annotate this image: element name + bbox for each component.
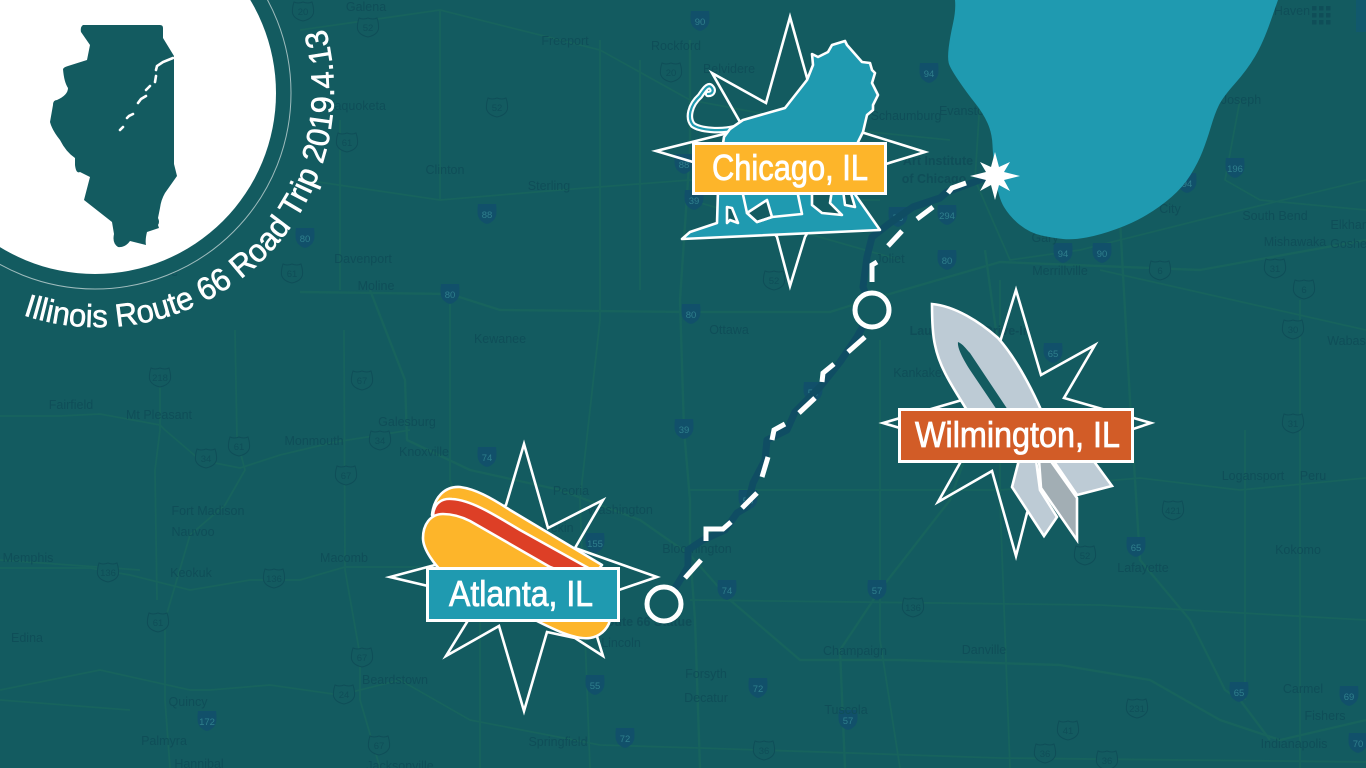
map: place names: Macomb <box>320 551 368 565</box>
map: place names: Pekin <box>542 521 574 535</box>
map: US route shields: 61 <box>342 138 352 149</box>
map: place names: Beardstown <box>362 673 428 687</box>
map: US route shields: 31 <box>1288 419 1298 430</box>
map: place names: Palmyra <box>141 734 187 748</box>
map: US route shields: 36 <box>1040 749 1050 760</box>
icon: lion body <box>722 41 878 150</box>
map: place names: Joseph <box>1221 93 1261 107</box>
map: place names: Tuscola <box>824 703 868 717</box>
map: place names: Springfield <box>528 735 588 749</box>
map: interstate shields: 94 <box>1182 179 1192 190</box>
map: US route shields: 231 <box>1129 704 1145 715</box>
map: place names: Monmouth <box>284 434 344 448</box>
map: US route shields: 52 <box>363 23 373 34</box>
map: US route shields: 20 <box>666 68 676 79</box>
map: US route shields: 67 <box>374 741 384 752</box>
roundel outer ring <box>0 0 291 289</box>
map: interstate shields: 172 <box>199 717 215 728</box>
map: US route shields: 34 <box>201 454 211 465</box>
map: place names: Evanston <box>939 104 991 118</box>
map: interstate shields: 74 <box>482 453 492 464</box>
roundel backing <box>0 0 291 289</box>
map: interstate shields: 55 <box>808 388 818 399</box>
map: place names: Clinton <box>426 163 464 177</box>
title: curved text: Illinois Route 66 Road Trip 2019.4.13 <box>25 30 334 328</box>
map: interstate shields: 155 <box>587 539 603 550</box>
map: US route shields: 136 <box>266 574 282 585</box>
map: place names: Bloomington <box>662 542 732 556</box>
route: dark road line <box>664 178 985 604</box>
lake michigan <box>948 0 1278 239</box>
map: place names: Ottawa <box>709 323 749 337</box>
map: US route shields: 52 <box>492 103 502 114</box>
map: interstate shields: 88 <box>482 210 492 221</box>
map: place names: Kewanee <box>474 332 526 346</box>
map: interstate shields: 196 <box>1227 164 1243 175</box>
map: place names: Joliet <box>875 252 905 266</box>
map: US route shields: 24 <box>339 690 349 701</box>
map: place names: Gary <box>1031 231 1059 245</box>
map: US route shields: 6 <box>1301 285 1307 296</box>
map: interstate shields: 65 <box>1048 349 1058 360</box>
map: US route shields: 52 <box>769 276 779 287</box>
map: place names: Logansport <box>1222 469 1285 483</box>
map: place names: Maquoketa <box>324 99 386 113</box>
map: place names: Danville <box>962 643 1006 657</box>
map: place names: Galesburg <box>378 415 436 429</box>
map: interstate shields: 88 <box>679 160 689 171</box>
map: place names: Memphis <box>3 551 53 565</box>
map: place names: Decatur <box>684 691 728 705</box>
map: US route shields: 61 <box>153 618 163 629</box>
icon: hot dog <box>423 487 610 638</box>
map: place names: Peoria <box>553 484 589 498</box>
label: Atlanta, IL: Atlanta, IL <box>449 573 593 614</box>
map: interstate shields: 72 <box>620 734 630 745</box>
icon: route start star <box>970 152 1020 200</box>
map: place names: City <box>1159 202 1182 216</box>
map: place names: Quincy <box>169 695 208 709</box>
map: US route shields: 52 <box>1080 551 1090 562</box>
map: US route shields: 67 <box>357 376 367 387</box>
map: place names: Fishers <box>1305 709 1345 723</box>
map: US route shields: 61 <box>287 269 297 280</box>
map: place names: Freeport <box>541 34 589 48</box>
badge: Atlanta <box>390 444 657 711</box>
map: interstate shields: 94 <box>1058 249 1068 260</box>
label: Chicago, IL: Chicago, IL <box>712 147 868 188</box>
map: interstate shields: 74 <box>722 586 732 597</box>
map: place names: Rockford <box>651 39 701 53</box>
badge: Chicago <box>656 17 925 286</box>
map: place names: Fairfield <box>49 398 93 412</box>
map: place names: Paul's Route 66 Statue <box>558 615 692 629</box>
map: place names: Nauvoo <box>171 525 215 539</box>
map: place names: Merrillville <box>1032 264 1088 278</box>
map: place names: Belvidere <box>703 62 755 76</box>
map: interstate shields: 69 <box>1344 692 1354 703</box>
stop marker: Wilmington <box>855 293 889 327</box>
route: white dashes <box>685 183 966 578</box>
map: interstate shields: 39 <box>689 196 699 207</box>
map: place names: Edina <box>11 631 43 645</box>
route dashes on state map <box>120 58 173 130</box>
map: US route shields: 36 <box>759 746 769 757</box>
map: US route shields: 36 <box>1102 756 1112 767</box>
stop marker: Atlanta <box>647 587 681 621</box>
map: place names: Kokomo <box>1275 543 1321 557</box>
map: interstate shields: 72 <box>753 684 763 695</box>
map: interstate shields: 55 <box>590 681 600 692</box>
map: US route shields: 136 <box>905 603 921 614</box>
map: interstate shields: 80 <box>445 290 455 301</box>
map: interstate shields: 80 <box>942 256 952 267</box>
map: US route shields: 67 <box>341 471 351 482</box>
map: place names: Davenport <box>334 252 392 266</box>
map: place names: Mt Pleasant <box>126 408 193 422</box>
map: interstate shields: 55 <box>743 496 753 507</box>
label: Atlanta, IL <box>428 568 618 620</box>
map: place names: Washington <box>587 503 653 517</box>
map: interstate shields: 57 <box>872 586 882 597</box>
map: place names: Lincoln <box>601 636 641 650</box>
map: place names: Haven <box>1274 4 1310 18</box>
map: interstate shields: 90 <box>1097 249 1107 260</box>
map: place names: Riverside <box>126 265 178 279</box>
map: place names: Sterling <box>528 179 570 193</box>
map: place names: Carmel <box>1283 682 1323 696</box>
map: place names: of Chicago <box>902 172 967 186</box>
label: Wilmington, IL: Wilmington, IL <box>915 414 1120 455</box>
map: interstate shields: 80 <box>300 234 310 245</box>
map: US route shields: 136 <box>100 568 116 579</box>
icon: lion tail <box>690 86 735 130</box>
map: place names: Champaign <box>823 644 887 658</box>
map: interstate shields: 90 <box>695 17 705 28</box>
map: interstate shields: 70 <box>1353 739 1363 750</box>
map: place names: Moline <box>358 279 394 293</box>
map: place names: Forsyth <box>685 667 727 681</box>
map: place names: Mishawaka <box>1264 235 1326 249</box>
map: place names: Fort Madison <box>172 504 245 518</box>
map: interstate shields: 65 <box>1131 543 1141 554</box>
icon: lion base <box>682 190 880 239</box>
map: place names: Knoxville <box>399 445 449 459</box>
compass star: Atlanta <box>390 444 657 711</box>
map: US route shields: 218 <box>152 373 168 384</box>
map: place names: Kankakee <box>893 366 949 380</box>
roundel white disc <box>0 0 276 274</box>
map: interstate shields: 94 <box>924 69 934 80</box>
map: place names: Galena <box>346 0 386 14</box>
panel: title roundel <box>0 0 334 328</box>
map: place names: Indianapolis <box>1261 737 1327 751</box>
map: US route shields: 6 <box>1157 266 1163 277</box>
map: place names: Keokuk <box>170 566 213 580</box>
map: corner tab <box>1356 0 1366 32</box>
map: US route shields: 421 <box>1165 506 1181 517</box>
map: place names: Lafayette <box>1117 561 1169 575</box>
compass star: Chicago <box>656 17 925 286</box>
map: interstate shields: 57 <box>843 716 853 727</box>
map: place names: Peru <box>1300 469 1326 483</box>
map: grid icon <box>1312 6 1330 24</box>
map: US route shields: 20 <box>298 7 308 18</box>
compass star: Wilmington <box>883 290 1151 556</box>
map: place names: South Bend <box>1242 209 1308 223</box>
map: US route shields: 34 <box>375 436 385 447</box>
badge: Wilmington <box>883 290 1151 556</box>
map: interstate shields: 65 <box>1234 688 1244 699</box>
map: US route shields: 41 <box>1063 726 1073 737</box>
map: interstate shields: 80 <box>686 310 696 321</box>
icon: Illinois state map <box>50 25 177 247</box>
map: US route shields: 31 <box>1270 264 1280 275</box>
icon: rocket <box>932 304 1112 540</box>
map: place names: Schaumburg <box>871 109 941 123</box>
map: interstate shields: 55 <box>893 213 903 224</box>
map: US route shields: 67 <box>357 653 367 664</box>
map: place names: Launch Pad Drive-In <box>910 324 1030 338</box>
map: US route shields: 30 <box>1288 325 1298 336</box>
map: interstate shields: 294 <box>939 211 955 222</box>
map: interstate shields: 39 <box>679 425 689 436</box>
map: place names: Art Institute <box>903 154 973 168</box>
map: US route shields: 61 <box>234 442 244 453</box>
